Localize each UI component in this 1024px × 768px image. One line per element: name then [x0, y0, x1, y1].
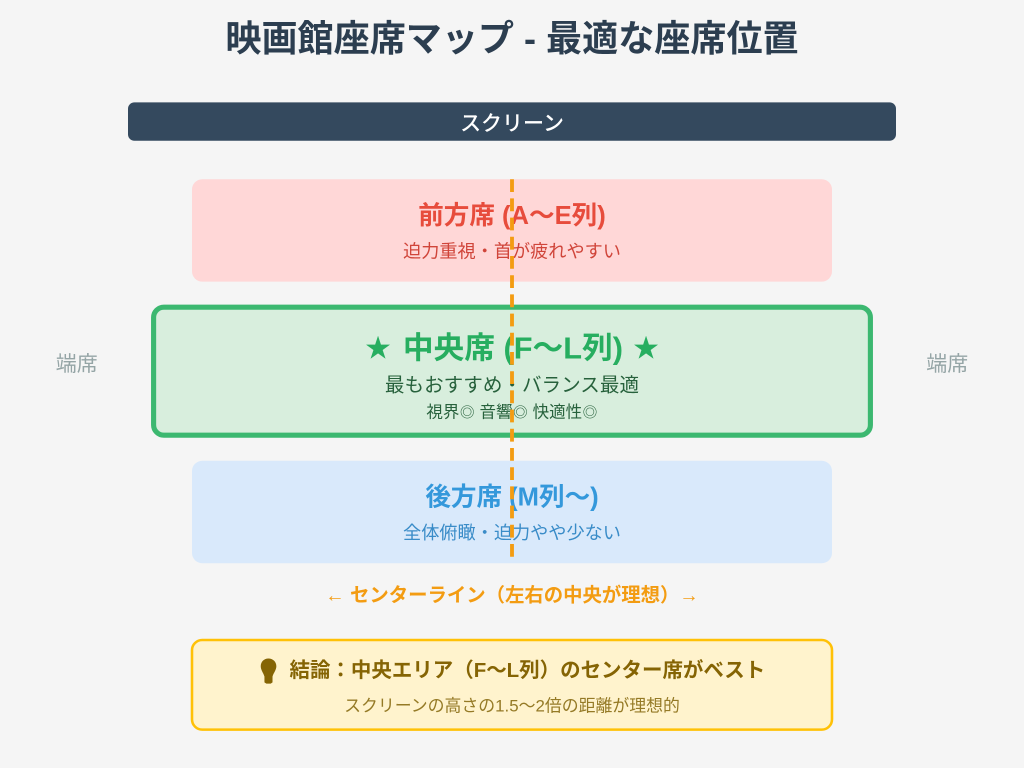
screen: スクリーン	[460, 113, 564, 136]
title: 映画館座席マップ - 最適な座席位置	[225, 18, 799, 59]
panel: front seats	[192, 179, 832, 282]
center seats heading: 中央席 (F〜L列)	[403, 330, 623, 365]
icon: light bulb	[261, 659, 276, 684]
screen	[128, 102, 896, 141]
conclusion heading: 結論：中央エリア（F〜L列）のセンター席がベスト	[289, 658, 765, 682]
center line	[510, 179, 514, 557]
conclusion detail: スクリーンの高さの1.5〜2倍の距離が理想的	[344, 697, 680, 716]
front seats description: 迫力重視・首が疲れやすい	[403, 241, 621, 261]
front seats heading: 前方席 (A〜E列)	[418, 201, 606, 230]
rear seats heading: 後方席 (M列〜)	[425, 483, 599, 512]
left star: ★	[365, 335, 391, 363]
right star: ★	[633, 335, 659, 363]
panel: center seats	[154, 307, 870, 435]
panel: conclusion	[192, 640, 832, 730]
center seats description: 最もおすすめ・バランス最適	[385, 375, 639, 397]
panel: rear seats	[192, 461, 832, 563]
rear seats description: 全体俯瞰・迫力やや少ない	[403, 523, 621, 543]
right side seats label: 端席	[926, 353, 968, 376]
center seats ratings: 視界◎ 音響◎ 快適性◎	[426, 402, 598, 421]
center line label: ← センターライン（左右の中央が理想）→	[325, 584, 699, 607]
left side seats label: 端席	[56, 353, 98, 376]
